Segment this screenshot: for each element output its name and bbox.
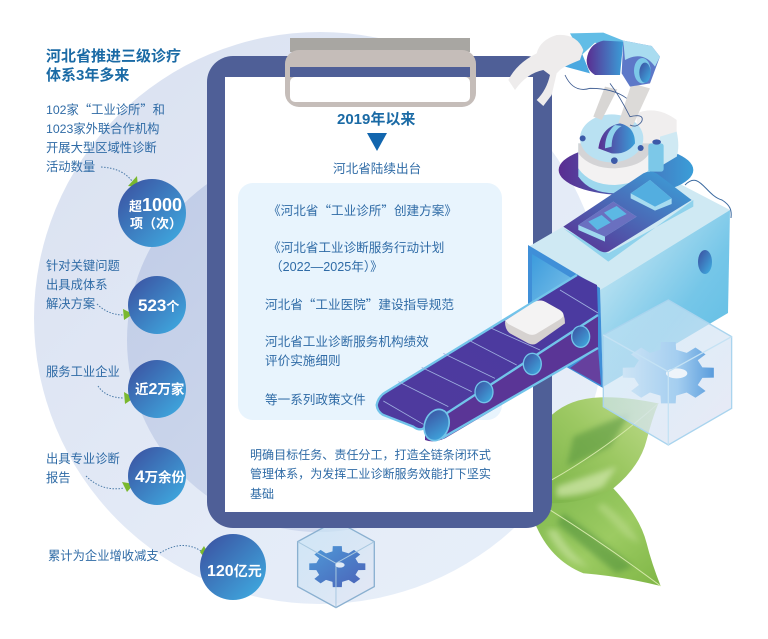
clipboard sheet (225, 77, 533, 512)
badge: 523个 (138, 296, 179, 315)
stat block: revenue (48, 534, 266, 600)
label: revenue: 累计为企业增收减支 (48, 548, 159, 563)
gear hole (666, 368, 687, 378)
drum (578, 143, 650, 193)
arrow (160, 546, 211, 560)
policy 1: 《河北省“工业诊所”创建方案》 (268, 200, 457, 219)
white rear shell (637, 110, 677, 167)
title: 体系3年多来 (46, 66, 129, 84)
icon: leaves (535, 397, 661, 586)
policy 3: 河北省“工业医院”建设指导规范 (265, 294, 454, 313)
stat block: regional activities (46, 100, 186, 247)
arrow: down triangle (367, 133, 387, 151)
background circle: inner (127, 148, 511, 532)
title: 河北省推进三级诊疗 (46, 48, 181, 65)
top surface (528, 172, 730, 290)
cube edges (603, 335, 732, 445)
cable (685, 180, 731, 218)
knob (698, 250, 712, 274)
label: enterprises: 服务工业企业 (46, 364, 120, 379)
purple inner (570, 348, 601, 385)
arm head (565, 33, 660, 87)
stat block: enterprises (46, 360, 186, 418)
summary text: 管理体系，为发挥工业诊断服务效能打下坚实 (250, 466, 491, 481)
panel background (238, 183, 502, 420)
belt rails (377, 275, 598, 429)
side cylinder (648, 143, 664, 172)
clip back (290, 38, 470, 52)
badge (118, 179, 186, 247)
label: activities: 102家“工业诊所”和 (46, 100, 165, 118)
label: solutions: 解决方案 (46, 296, 95, 311)
right face (600, 210, 730, 387)
stat block: reports (46, 447, 186, 505)
arrow (86, 476, 134, 492)
badge: 近2万家 (135, 381, 185, 398)
arrow (98, 386, 134, 404)
arrow (97, 304, 133, 320)
arm struts (618, 83, 650, 128)
product block (505, 300, 565, 344)
policy 2: 《河北省工业诊断服务行动计划 (268, 241, 444, 255)
gear (623, 342, 714, 403)
robot control panel (563, 172, 693, 262)
policy 4: 评价实施细则 (265, 354, 341, 368)
label: activities: 开展大型区域性诊断 (46, 140, 157, 155)
stat block: solutions (46, 258, 186, 334)
subheading: 河北省陆续出台 (333, 161, 421, 176)
label: reports: 出具专业诊断 (46, 452, 120, 466)
label: solutions: 出具成体系 (46, 278, 108, 292)
leaf: lower (535, 488, 661, 586)
label: activities: 1023家外联合作机构 (46, 121, 159, 136)
joint (634, 58, 651, 83)
machine box (528, 172, 731, 388)
left button (578, 202, 637, 242)
robot base plate (559, 145, 693, 195)
cube body (603, 300, 732, 445)
icon: small gear cube (298, 521, 374, 608)
front roller (420, 406, 453, 444)
heading: since 2019: 2019年以来 (337, 110, 415, 128)
clip ring (285, 50, 476, 107)
label: activities: 活动数量 (46, 159, 95, 174)
icon: large gear cube (603, 300, 732, 445)
lower rail (442, 348, 598, 438)
summary text: 基础 (250, 487, 274, 501)
badge: 项（次） (130, 216, 182, 231)
belt side (425, 315, 598, 441)
panel edge (563, 200, 693, 262)
dome core (598, 123, 635, 154)
badge (200, 534, 266, 600)
summary text: 明确目标任务、责任分工，打造全链条闭环式 (250, 448, 491, 462)
panel: policy list (238, 183, 502, 420)
badge: 4万余份 (135, 467, 185, 486)
front frame (528, 245, 603, 388)
wires (565, 75, 642, 126)
policy 2: （2022—2025年）》 (270, 260, 383, 274)
belt top (377, 275, 598, 429)
clipboard (207, 38, 552, 528)
right button (631, 180, 672, 211)
badge: 超1000 (129, 195, 182, 215)
small rollers (475, 326, 590, 403)
conveyor belt (377, 275, 598, 444)
bolts (580, 135, 661, 164)
clipboard frame (207, 56, 552, 528)
policy 4: 河北省工业诊断服务机构绩效 (265, 335, 429, 349)
dome (580, 114, 643, 162)
label: solutions: 针对关键问题 (46, 259, 120, 273)
belt slats (383, 290, 598, 424)
label: reports: 报告 (46, 470, 71, 485)
leaf: upper (552, 397, 658, 503)
background circle: outer (34, 32, 606, 604)
opening interior (532, 254, 597, 345)
badge: 120亿元 (207, 563, 262, 580)
robot arm (508, 33, 693, 195)
policy 5: 等一系列政策文件 (265, 392, 366, 407)
panel top (563, 172, 692, 252)
gripper (508, 35, 583, 106)
arrow (101, 167, 138, 187)
